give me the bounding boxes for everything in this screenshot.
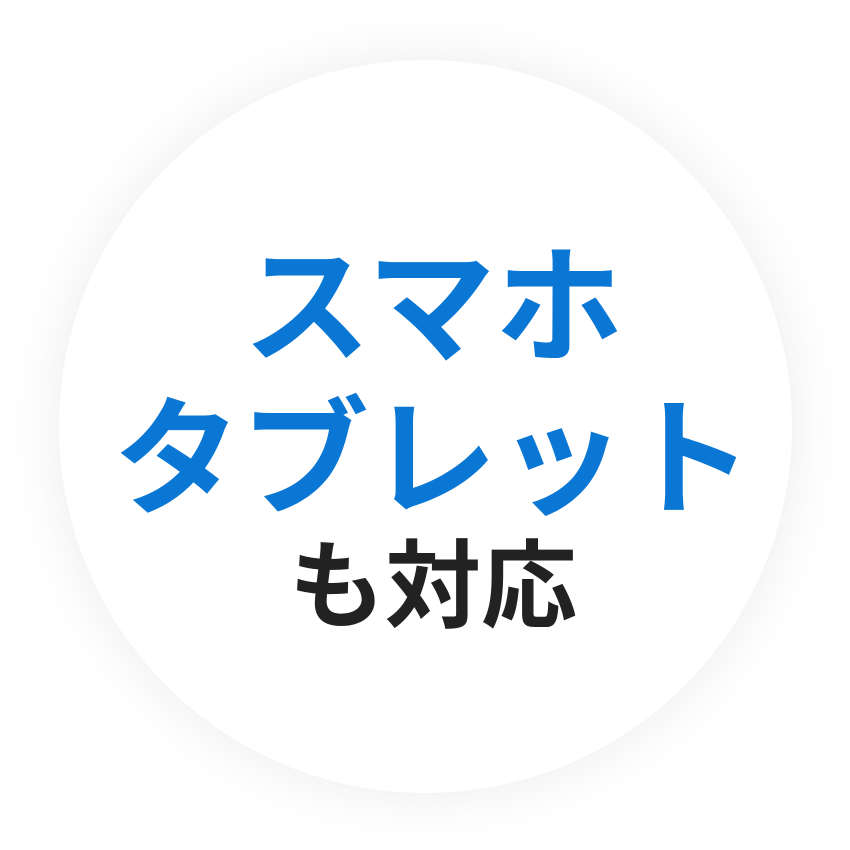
heading: line 1: スマホ [243, 237, 623, 380]
text: supported: も対応 [289, 534, 577, 641]
heading: line 2: タブレット [113, 389, 753, 532]
circular badge [59, 60, 792, 793]
